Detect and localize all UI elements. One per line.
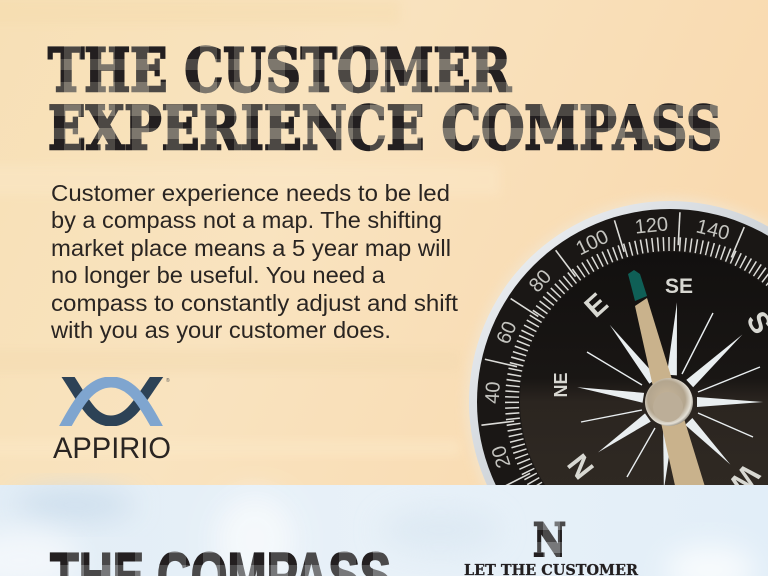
cardinal letters: W <box>722 457 766 501</box>
degree numbers: 60 <box>493 318 522 347</box>
needle hub <box>645 378 693 426</box>
degree numbers: 40 <box>482 381 505 404</box>
dial <box>477 209 768 485</box>
main title: THE CUSTOMER <box>48 36 512 106</box>
bezel <box>464 196 768 485</box>
cardinal letters: E <box>579 287 615 324</box>
panel: sky background <box>0 485 768 576</box>
intro text block: with you as your customer does. <box>50 317 391 343</box>
degree ticks <box>481 212 768 485</box>
intro text block: Customer experience needs to be led <box>51 180 450 206</box>
logo: Appirio <box>53 377 170 458</box>
intro text block: no longer be useful. You need a <box>51 262 385 288</box>
intro text block <box>50 180 459 343</box>
cardinal letters: NE <box>551 372 571 398</box>
degree numbers: 80 <box>525 266 556 297</box>
cardinal letters <box>551 275 768 501</box>
compass point: north: N <box>533 513 566 567</box>
intro text block: market place means a 5 year map will <box>51 235 451 261</box>
logo: Appirio: ® <box>166 377 170 384</box>
degree numbers: 140 <box>694 216 732 245</box>
main title <box>48 36 722 164</box>
degree numbers: 120 <box>634 213 669 239</box>
compass needle <box>628 270 706 490</box>
logo: Appirio: APPIRIO <box>53 432 171 465</box>
star rose <box>576 302 763 490</box>
intro text block: compass to constantly adjust and shift <box>51 290 459 316</box>
compass photo <box>464 196 768 485</box>
compass point: north <box>464 513 639 576</box>
degree numbers: 100 <box>573 226 612 260</box>
cardinal letters: SE <box>665 275 693 298</box>
degree numbers: 20 <box>488 443 516 471</box>
cardinal letters: N <box>562 447 601 485</box>
degree numbers <box>482 213 732 471</box>
intro text block: by a compass not a map. The shifting <box>51 207 442 233</box>
